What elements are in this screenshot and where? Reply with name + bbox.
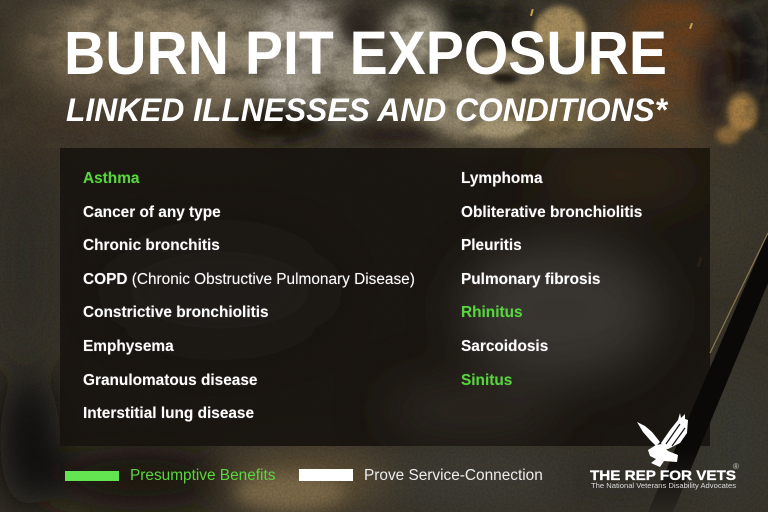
icon: eagle [637, 413, 688, 467]
title: BURN PIT EXPOSURE [64, 19, 667, 87]
panel: illness list backdrop [60, 148, 710, 446]
condition: Sarcoidosis: Sarcoidosis [461, 338, 548, 355]
condition: Sinitus: Sinitus [461, 372, 512, 389]
condition: Interstitial lung disease: Interstitial lung disease [83, 405, 254, 422]
legend: presumptive benefits [65, 467, 275, 484]
condition: Constrictive bronchiolitis: Constrictive bronchiolitis [83, 304, 269, 321]
condition: Emphysema: Emphysema [83, 338, 174, 355]
left column of conditions [83, 170, 415, 422]
condition: Rhinitus: Rhinitus [461, 304, 523, 321]
spark marks [530, 9, 702, 267]
condition: Cancer of any type: Cancer of any type [83, 204, 221, 221]
subtitle: LINKED ILLNESSES AND CONDITIONS* [66, 92, 669, 128]
tagline: The National Veterans Disability Advocates [591, 481, 736, 490]
condition: Chronic bronchitis: Chronic bronchitis [83, 237, 220, 254]
right column of conditions [461, 170, 642, 389]
registered mark: ® [733, 462, 739, 471]
condition: COPD: COPD (Chronic Obstructive Pulmonary Disease) [83, 271, 415, 288]
legend: prove service-connection: Prove Service-Connection [364, 467, 543, 484]
condition: Asthma: Asthma [83, 170, 139, 187]
condition: Granulomatous disease: Granulomatous disease [83, 372, 257, 389]
condition: Lymphoma: Lymphoma [461, 170, 543, 187]
condition: Obliterative bronchiolitis: Obliterative bronchiolitis [461, 204, 642, 221]
wordmark: THE REP FOR VETS [590, 468, 736, 483]
legend: presumptive benefits: Presumptive Benefits [130, 467, 275, 484]
condition: Pulmonary fibrosis: Pulmonary fibrosis [461, 271, 600, 288]
condition: Pleuritis: Pleuritis [461, 237, 522, 254]
